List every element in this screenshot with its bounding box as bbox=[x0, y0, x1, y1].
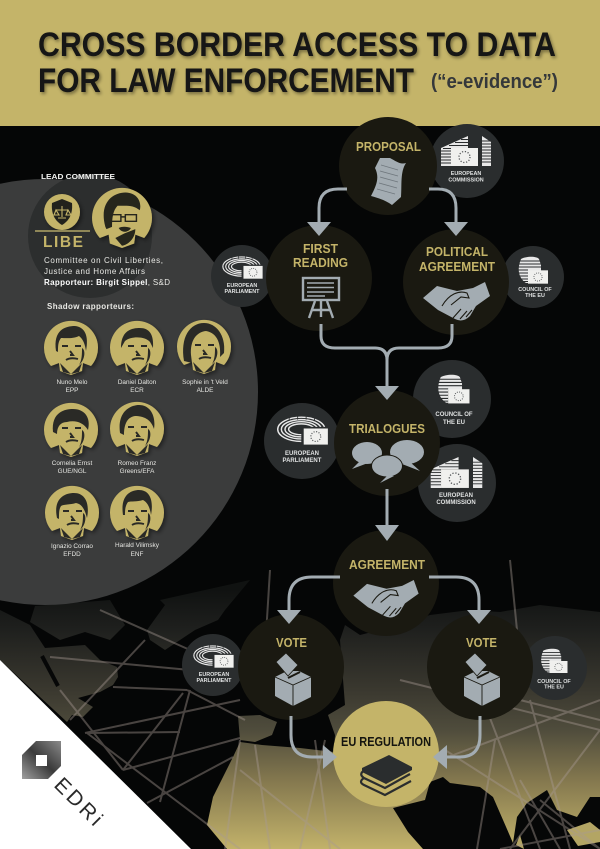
committee description: Justice and Home Affairs bbox=[44, 267, 145, 276]
badge: European Commission (proposal): EUROPEAN bbox=[451, 171, 481, 177]
badge: Council of the EU (vote) bbox=[523, 636, 587, 700]
portrait: Nuno Melo: Nuno Melo bbox=[57, 379, 88, 386]
header band bbox=[0, 0, 600, 126]
node: first reading bbox=[266, 225, 372, 331]
node: trialogues bbox=[334, 390, 440, 496]
badge: Council of the EU (trialogues) bbox=[413, 360, 491, 438]
portrait: Romeo Franz: Greens/EFA bbox=[120, 468, 155, 475]
panel: committee background circle bbox=[0, 179, 258, 605]
icon: books bbox=[361, 755, 412, 795]
node: proposal bbox=[339, 117, 437, 215]
committee description: Rapporteur: Birgit Sippel, S&D bbox=[44, 278, 170, 287]
badge: European Parliament (trialogues) bbox=[264, 403, 340, 479]
portrait: Cornelia Ernst bbox=[44, 403, 98, 475]
node: first reading: READING bbox=[293, 256, 348, 270]
subtitle: (“e-evidence”) bbox=[431, 71, 558, 93]
portrait: Harald Vilimsky: ENF bbox=[131, 551, 143, 558]
node: vote (council) bbox=[427, 614, 533, 720]
portrait: Nuno Melo bbox=[44, 321, 98, 394]
LIBE label: LIBE bbox=[43, 234, 83, 251]
portrait: Ignazio Corrao bbox=[45, 486, 99, 558]
node: political agreement: POLITICAL bbox=[426, 245, 488, 259]
portrait: Cornelia Ernst: Cornelia Ernst bbox=[52, 460, 92, 467]
portrait: Sophie in 't Veld bbox=[177, 320, 231, 394]
portrait: Harald Vilimsky: Harald Vilimsky bbox=[115, 542, 160, 549]
badge: European Parliament (first reading): EUROPEAN bbox=[227, 283, 257, 289]
icon: LIBE shield bbox=[44, 194, 80, 230]
node: trialogues: TRIALOGUES bbox=[349, 422, 425, 436]
portrait: Sophie in 't Veld: ALDE bbox=[197, 387, 213, 394]
LIBE label bbox=[35, 230, 90, 251]
portrait: Daniel Dalton bbox=[110, 321, 164, 394]
badge: European Commission (proposal) bbox=[430, 124, 504, 198]
icon: ballot box bbox=[464, 653, 500, 706]
node: vote (council): VOTE bbox=[466, 636, 497, 650]
node: vote (parliament) bbox=[238, 614, 344, 720]
badge: Council of the EU (vote): THE EU bbox=[544, 684, 564, 690]
badge: Council of the EU (trialogues): COUNCIL OF bbox=[435, 412, 473, 418]
title bbox=[38, 26, 556, 100]
badge: European Commission (trialogues) bbox=[418, 444, 496, 522]
portrait: Daniel Dalton: ECR bbox=[130, 387, 144, 394]
badge: European Parliament (trialogues): EUROPEAN bbox=[285, 451, 319, 457]
title: FOR LAW ENFORCEMENT bbox=[38, 62, 414, 100]
icon: handshake bbox=[353, 580, 419, 617]
node: political agreement bbox=[403, 229, 509, 335]
world map bbox=[0, 560, 600, 849]
portrait: Ignazio Corrao: EFDD bbox=[63, 551, 81, 558]
node: agreement bbox=[333, 530, 439, 636]
portrait: Harald Vilimsky bbox=[110, 486, 164, 558]
portrait: Nuno Melo: EPP bbox=[66, 387, 78, 394]
badge: Council of the EU (political agreement): THE EU bbox=[525, 293, 545, 299]
icon: handshake bbox=[423, 282, 490, 320]
badge: European Parliament (trialogues): PARLIAMENT bbox=[283, 458, 322, 464]
icon: ballot box bbox=[275, 653, 311, 706]
icon: easel bbox=[303, 278, 339, 318]
badge: European Commission (proposal): COMMISSION bbox=[448, 178, 484, 184]
lead committee darker circle bbox=[28, 174, 152, 298]
network lines bbox=[50, 560, 600, 849]
icon: document bbox=[371, 158, 406, 205]
icon: speech bubbles bbox=[352, 440, 424, 483]
node: agreement: AGREEMENT bbox=[349, 558, 425, 572]
badge: European Parliament (first reading): PARLIAMENT bbox=[225, 289, 260, 295]
node: first reading: FIRST bbox=[303, 242, 338, 256]
portrait: Romeo Franz: Romeo Franz bbox=[118, 460, 156, 467]
node: proposal: PROPOSAL bbox=[356, 140, 421, 154]
shadow rapporteurs heading: Shadow rapporteurs: bbox=[47, 302, 134, 311]
badge: European Parliament (vote): PARLIAMENT bbox=[197, 678, 232, 684]
lead committee heading: LEAD COMMITTEE bbox=[41, 172, 115, 181]
badge: European Commission (trialogues): EUROPEAN bbox=[439, 493, 473, 499]
arrows bbox=[277, 189, 491, 769]
badge: European Parliament (vote) bbox=[182, 634, 244, 696]
badge: Council of the EU (political agreement): COUNCIL OF bbox=[518, 287, 552, 293]
badge: European Commission (trialogues): COMMISSION bbox=[436, 500, 476, 506]
node: vote (parliament): VOTE bbox=[276, 636, 307, 650]
portrait: Cornelia Ernst: GUE/NGL bbox=[58, 468, 87, 475]
badge: Council of the EU (vote): COUNCIL OF bbox=[537, 679, 571, 685]
node: EU regulation: EU REGULATION bbox=[341, 735, 431, 749]
portrait: Romeo Franz bbox=[110, 402, 164, 475]
portrait: Daniel Dalton: Daniel Dalton bbox=[118, 379, 157, 386]
committee description: Committee on Civil Liberties, bbox=[44, 256, 163, 265]
portrait: Ignazio Corrao: Ignazio Corrao bbox=[51, 543, 93, 550]
white corner bbox=[0, 660, 191, 849]
committee description bbox=[44, 256, 170, 287]
EDRi wordmark: EDRi bbox=[49, 773, 107, 831]
badge: Council of the EU (trialogues): THE EU bbox=[443, 420, 465, 426]
node: EU regulation bbox=[333, 701, 439, 807]
badge: European Parliament (vote): EUROPEAN bbox=[199, 672, 229, 678]
portrait: Birgit Sippel bbox=[92, 188, 152, 248]
icon: EDRi logo bbox=[22, 741, 61, 779]
badge: Council of the EU (political agreement) bbox=[502, 246, 564, 308]
node: political agreement: AGREEMENT bbox=[419, 260, 495, 274]
badge: European Parliament (first reading) bbox=[211, 245, 273, 307]
portrait: Sophie in 't Veld: Sophie in 't Veld bbox=[182, 379, 228, 386]
